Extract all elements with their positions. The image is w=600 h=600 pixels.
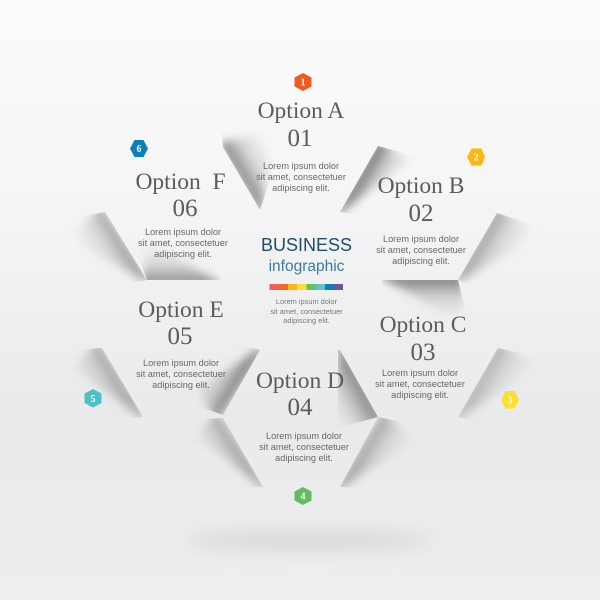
option A [256,98,346,193]
option E: adipiscing elit. [152,380,210,390]
option F: adipiscing elit. [154,249,212,259]
option F: sit amet, consectetuer [138,238,228,248]
rainbow bar [270,284,343,290]
badge 6: 6 [136,144,142,155]
option A: sit amet, consectetuer [256,172,346,182]
option E: 05 [168,323,192,350]
option E [136,297,226,390]
center text: adipiscing elit. [283,316,330,325]
option B: 02 [408,200,434,227]
badge 5: 5 [90,394,96,405]
option B: adipiscing elit. [392,256,450,266]
option B: Lorem ipsum dolor [383,234,459,244]
option F [135,169,228,259]
badge 1 [294,73,312,91]
option F: Option F [135,169,226,195]
option C: adipiscing elit. [391,390,449,400]
center title: BUSINESS [261,235,352,255]
option C: sit amet, consectetuer [375,379,465,389]
center text: sit amet, consectetuer [270,307,343,316]
option A: Lorem ipsum dolor [263,161,339,171]
option D: Option D [256,368,344,394]
option B: sit amet, consectetuer [376,245,466,255]
badge 4 [294,487,312,505]
option A: 01 [288,125,312,152]
option D [256,368,349,463]
center title: infographic [269,258,345,275]
center text [270,297,343,325]
option D: adipiscing elit. [275,453,333,463]
center title [261,235,352,275]
badge 3 [501,391,519,408]
badge 3: 3 [508,396,512,406]
option D: Lorem ipsum dolor [266,431,342,441]
badge 2 [467,148,485,166]
badge 5 [84,389,102,408]
option C: 03 [410,339,436,366]
badge 4: 4 [300,492,306,502]
option E: Option E [138,297,224,323]
fold shadows [70,130,540,493]
option E: sit amet, consectetuer [136,369,226,379]
option A: adipiscing elit. [272,183,330,193]
option C: Option C [380,312,466,338]
option F: 06 [172,195,198,222]
option A: Option A [258,98,344,124]
option D: sit amet, consectetuer [259,442,349,452]
option C: Lorem ipsum dolor [382,368,458,378]
badge 2: 2 [474,152,478,164]
ground shadow [185,533,435,549]
badge 1: 1 [300,78,306,88]
option C [375,312,466,400]
option E: Lorem ipsum dolor [143,358,219,368]
option B [376,173,466,266]
option D: 04 [288,394,313,421]
option B: Option B [378,173,464,199]
badge 6 [130,140,148,157]
center text: Lorem ipsum dolor [276,297,338,306]
option F: Lorem ipsum dolor [145,227,221,237]
